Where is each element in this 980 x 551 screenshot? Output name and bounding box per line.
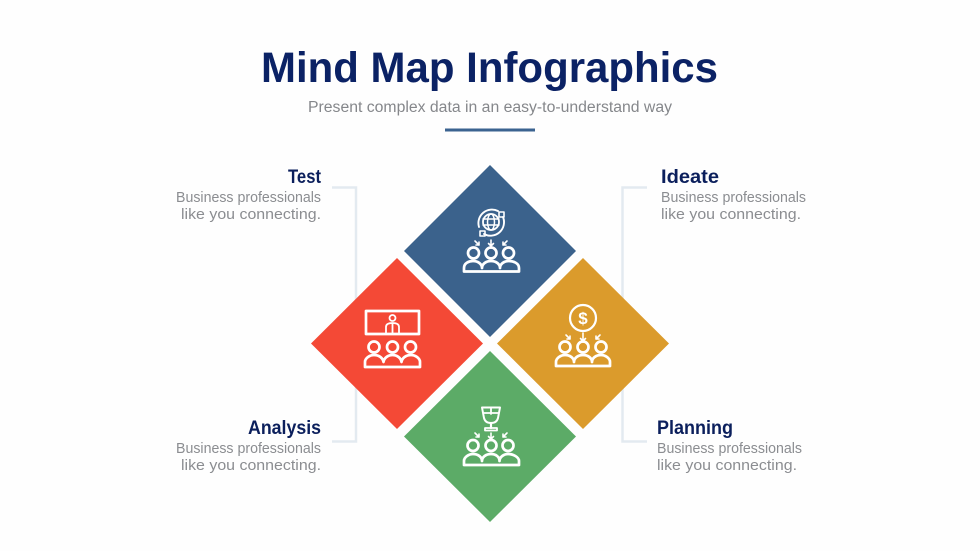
icon: presenter with audience <box>365 311 420 367</box>
text block: Analysis: Analysis <box>248 418 321 439</box>
text block: Planning: Business professionals <box>657 441 802 457</box>
diamond: bottom green <box>404 351 576 522</box>
text block: Ideate: Business professionals <box>661 190 806 206</box>
text block: Ideate: like you connecting. <box>661 207 801 223</box>
icon: dollar coin with audience <box>556 305 610 366</box>
diamond: right orange <box>497 258 669 429</box>
text block: Test: Test <box>288 167 322 188</box>
icon: trophy with audience <box>464 408 519 465</box>
text block: Analysis: like you connecting. <box>181 458 321 474</box>
text block: Planning: like you connecting. <box>657 458 797 474</box>
icon: globe with audience <box>464 210 519 272</box>
title: Mind Map Infographics <box>261 44 718 92</box>
right bracket <box>622 188 647 442</box>
diamond: left red <box>311 258 483 429</box>
icon: dollar coin with audience: $ <box>578 309 588 328</box>
diamond: top blue <box>404 165 576 337</box>
subtitle: Present complex data in an easy-to-understand way <box>308 99 672 116</box>
text block: Test <box>176 167 322 223</box>
text block: Test: like you connecting. <box>181 207 321 223</box>
left bracket <box>332 188 356 442</box>
text block: Analysis: Business professionals <box>176 441 321 457</box>
text block: Planning: Planning <box>657 418 733 439</box>
text block: Ideate: Ideate <box>661 167 719 188</box>
title underline <box>445 128 535 132</box>
text block: Planning <box>657 418 802 474</box>
text block: Analysis <box>176 418 321 474</box>
text block: Ideate <box>661 167 806 223</box>
text block: Test: Business professionals <box>176 190 321 206</box>
